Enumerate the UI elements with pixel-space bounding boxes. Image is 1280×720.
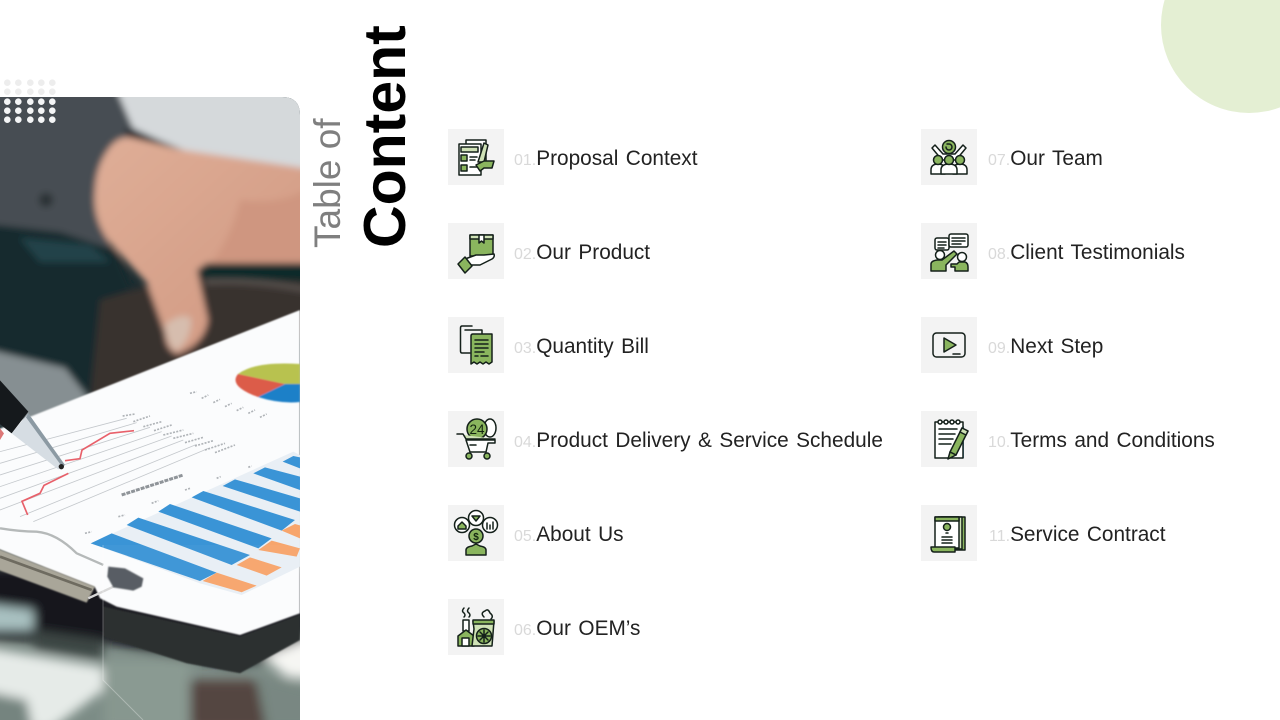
icon: factory with cooling tower xyxy=(448,599,504,655)
item 05: About Us xyxy=(448,505,624,561)
upper blurred scene xyxy=(0,97,300,428)
label: 01.Proposal Context xyxy=(514,147,697,170)
photo: hand pointing at business report xyxy=(0,97,300,720)
clip xyxy=(0,528,103,565)
icon: box on hand xyxy=(448,223,504,279)
title xyxy=(307,25,418,248)
label: 03.Quantity Bill xyxy=(514,335,649,358)
icon: notepad with pen xyxy=(921,411,977,467)
label: 11.Service Contract xyxy=(989,523,1166,546)
icon: contract document xyxy=(921,505,977,561)
icon: receipt xyxy=(448,317,504,373)
line chart grid xyxy=(0,418,208,522)
icon: 24 hour cart: 24 xyxy=(469,422,485,437)
bar chart xyxy=(91,456,300,592)
pie chart xyxy=(236,363,300,402)
line chart red traces xyxy=(22,431,134,515)
label: 08.Client Testimonials xyxy=(988,241,1185,264)
icon: person with value bubbles xyxy=(448,505,504,561)
title: Table of xyxy=(307,118,348,248)
lower blurred table xyxy=(0,310,320,720)
label: 02.Our Product xyxy=(514,241,650,264)
label: 07.Our Team xyxy=(988,147,1103,170)
title: Content xyxy=(352,25,418,248)
item 08: Client Testimonials xyxy=(921,223,1185,279)
icon: team with leader xyxy=(921,129,977,185)
pen xyxy=(0,377,28,433)
item 04: Product Delivery & Service Schedule xyxy=(448,411,883,467)
label: 09.Next Step xyxy=(988,335,1103,358)
icon: two people talking xyxy=(921,223,977,279)
item 07: Our Team xyxy=(921,129,1103,185)
item 06: Our OEM's xyxy=(448,599,640,655)
label: 06.Our OEM’s xyxy=(514,617,640,640)
item 10: Terms and Conditions xyxy=(921,411,1215,467)
item 02: Our Product xyxy=(448,223,650,279)
icon: 24 hour cart xyxy=(448,411,504,467)
item 03: Quantity Bill xyxy=(448,317,649,373)
chart tick labels xyxy=(85,392,267,533)
label: 05.About Us xyxy=(514,523,624,546)
paper xyxy=(0,310,300,635)
chart field xyxy=(91,452,300,595)
item 09: Next Step xyxy=(921,317,1103,373)
icon: video play xyxy=(921,317,977,373)
decorative circle top right xyxy=(1161,0,1280,113)
icon: person with value bubbles: $ xyxy=(473,532,479,543)
item 11: Service Contract xyxy=(921,505,1166,561)
label: 04.Product Delivery & Service Schedule xyxy=(514,429,883,452)
item 01: Proposal Context xyxy=(448,129,698,185)
icon: checklist and hand xyxy=(448,129,504,185)
label: 10.Terms and Conditions xyxy=(988,429,1215,452)
decorative dot grid xyxy=(4,80,56,123)
